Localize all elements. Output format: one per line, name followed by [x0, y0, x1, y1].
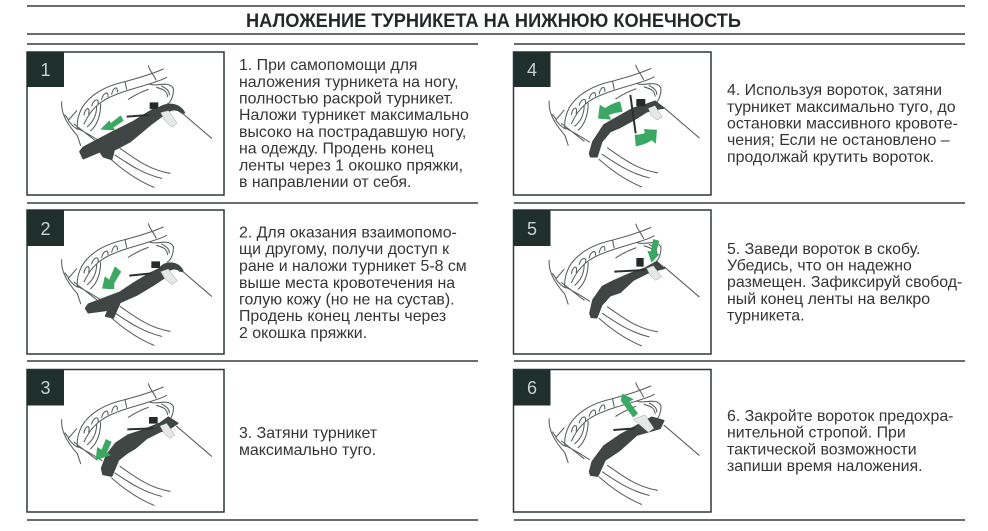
arrow: green, upper [598, 102, 622, 119]
title: НАЛОЖЕНИЕ ТУРНИКЕТА НА НИЖНЮЮ КОНЕЧНОСТЬ [246, 10, 741, 32]
panel: step 5 [514, 210, 711, 354]
text: step 2: 2. Для оказания взаимопомо- [239, 224, 457, 242]
arrow: green [621, 394, 638, 417]
text: step 5: размещен. Зафиксируй свобод- [727, 274, 962, 291]
illustration: step 6 [549, 383, 699, 504]
text: step 1: полностью раскрой турникет. [239, 90, 453, 108]
text: step 3: максимально туго. [239, 442, 376, 459]
text: step 6: 6. Закройте вороток предохра- [727, 408, 953, 425]
number badge 1: 1 [40, 60, 51, 80]
text: step 1: высоко на пострадавшую ногу, [239, 124, 466, 141]
panel: step 3 [27, 370, 224, 512]
text: step 4: чения; Если не остановлено – [727, 132, 950, 149]
text: step 1: наложения турникета на ногу, [239, 74, 459, 91]
illustration: step 2 [62, 224, 212, 345]
text: step 1: в направлении от себя. [239, 174, 411, 191]
number badge 6 [514, 370, 550, 406]
text: step 4: продолжай крутить вороток. [727, 149, 934, 166]
text: step 5: ный конец ленты на велкро [727, 291, 930, 308]
text: step 5: 5. Заведи вороток в скобу. [727, 241, 920, 258]
text: step 6: тактической возможности [727, 442, 917, 458]
panel: step 6 [514, 370, 711, 512]
text: step 3: 3. Затяни турникет [239, 425, 377, 442]
text: step 6: запиши время наложения. [727, 458, 923, 475]
text: step 2: 2 окошка пряжки. [239, 325, 367, 342]
panel: step 4 [514, 52, 711, 195]
number badge 4 [514, 52, 550, 87]
text: step 2: выше места кровотечения на [239, 275, 455, 292]
top rule [27, 5, 965, 7]
number badge 3: 3 [40, 378, 51, 398]
text: step 2: Продень конец ленты через [239, 308, 446, 325]
text: step 4: турникет максимально туго, до [727, 99, 956, 116]
text: step 4: 4. Используя вороток, затяни [727, 82, 942, 99]
text: step 2: голую кожу (но не на сустав). [239, 292, 455, 308]
text: step 4: остановки массивного кровоте- [727, 116, 958, 132]
text: step 2: ране и наложи турникет 5-8 см [239, 258, 467, 275]
text: step 1: на одежду. Продень конец [239, 140, 434, 158]
number badge 6: 6 [527, 378, 537, 398]
panel: step 2 [27, 210, 224, 354]
text: step 1: ленты через 1 окошко пряжки, [239, 158, 463, 174]
number badge 3 [27, 370, 64, 406]
text: step 2: щи другому, получи доступ к [239, 241, 450, 258]
arrow: green, lower [635, 129, 657, 146]
arrow: green [102, 267, 121, 289]
arrow: green [101, 116, 123, 130]
text: step 5: Убедись, что он надежно [727, 258, 912, 274]
number badge 4: 4 [527, 60, 537, 80]
arrow: green [648, 239, 659, 262]
text: step 1: Наложи турникет максимально [239, 107, 469, 124]
number badge 1 [27, 52, 64, 87]
illustration: step 1 [62, 66, 212, 187]
number badge 5: 5 [527, 219, 537, 239]
number badge 2 [27, 210, 64, 246]
illustration: step 3 [62, 384, 212, 505]
panel: step 1 [27, 52, 224, 195]
number badge 2: 2 [40, 219, 51, 239]
illustration: step 5 [549, 224, 699, 346]
text: step 1: 1. При самопомощи для [239, 57, 417, 74]
arrow: green [96, 439, 111, 460]
illustration: step 4 [549, 65, 699, 187]
text: step 5: турникета. [727, 308, 805, 324]
text: step 6: нительной стропой. При [727, 424, 906, 442]
number badge 5 [514, 210, 550, 246]
